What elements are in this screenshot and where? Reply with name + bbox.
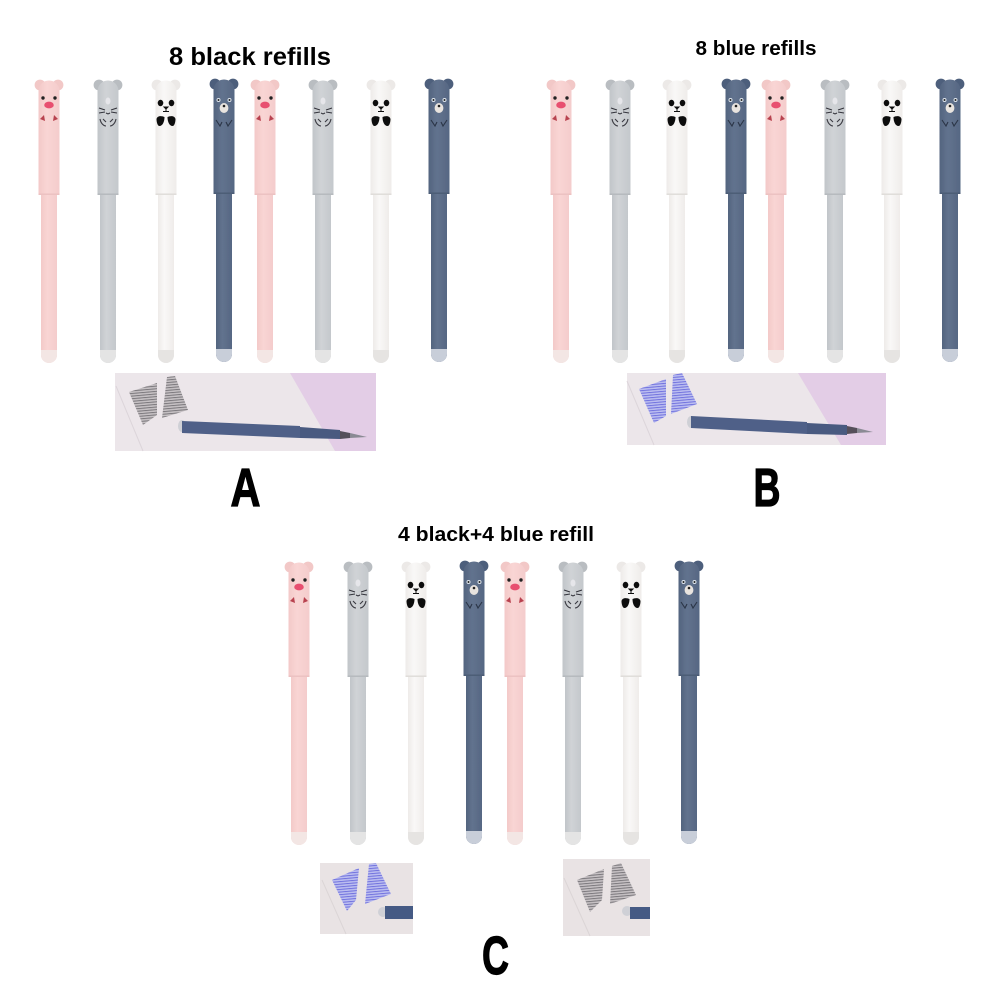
heading: 4 black+4 blue refill: 4 black+4 blue refill bbox=[398, 524, 594, 546]
panel C: row of eight pens bbox=[285, 561, 703, 845]
option label C: C bbox=[482, 926, 509, 986]
photo C right: black ink sample bbox=[563, 859, 650, 936]
photo C left: blue ink sample bbox=[320, 863, 413, 934]
panel B: row of eight pens bbox=[547, 79, 964, 363]
panel A: row of eight pens bbox=[35, 79, 453, 363]
option label A: A bbox=[230, 458, 260, 518]
photo A: black ink sample with pen bbox=[115, 373, 376, 451]
heading: 8 blue refills: 8 blue refills bbox=[696, 38, 816, 60]
photo B: blue ink sample with pen bbox=[627, 373, 886, 445]
option label B: B bbox=[754, 458, 780, 518]
heading: 8 black refills: 8 black refills bbox=[169, 43, 331, 71]
